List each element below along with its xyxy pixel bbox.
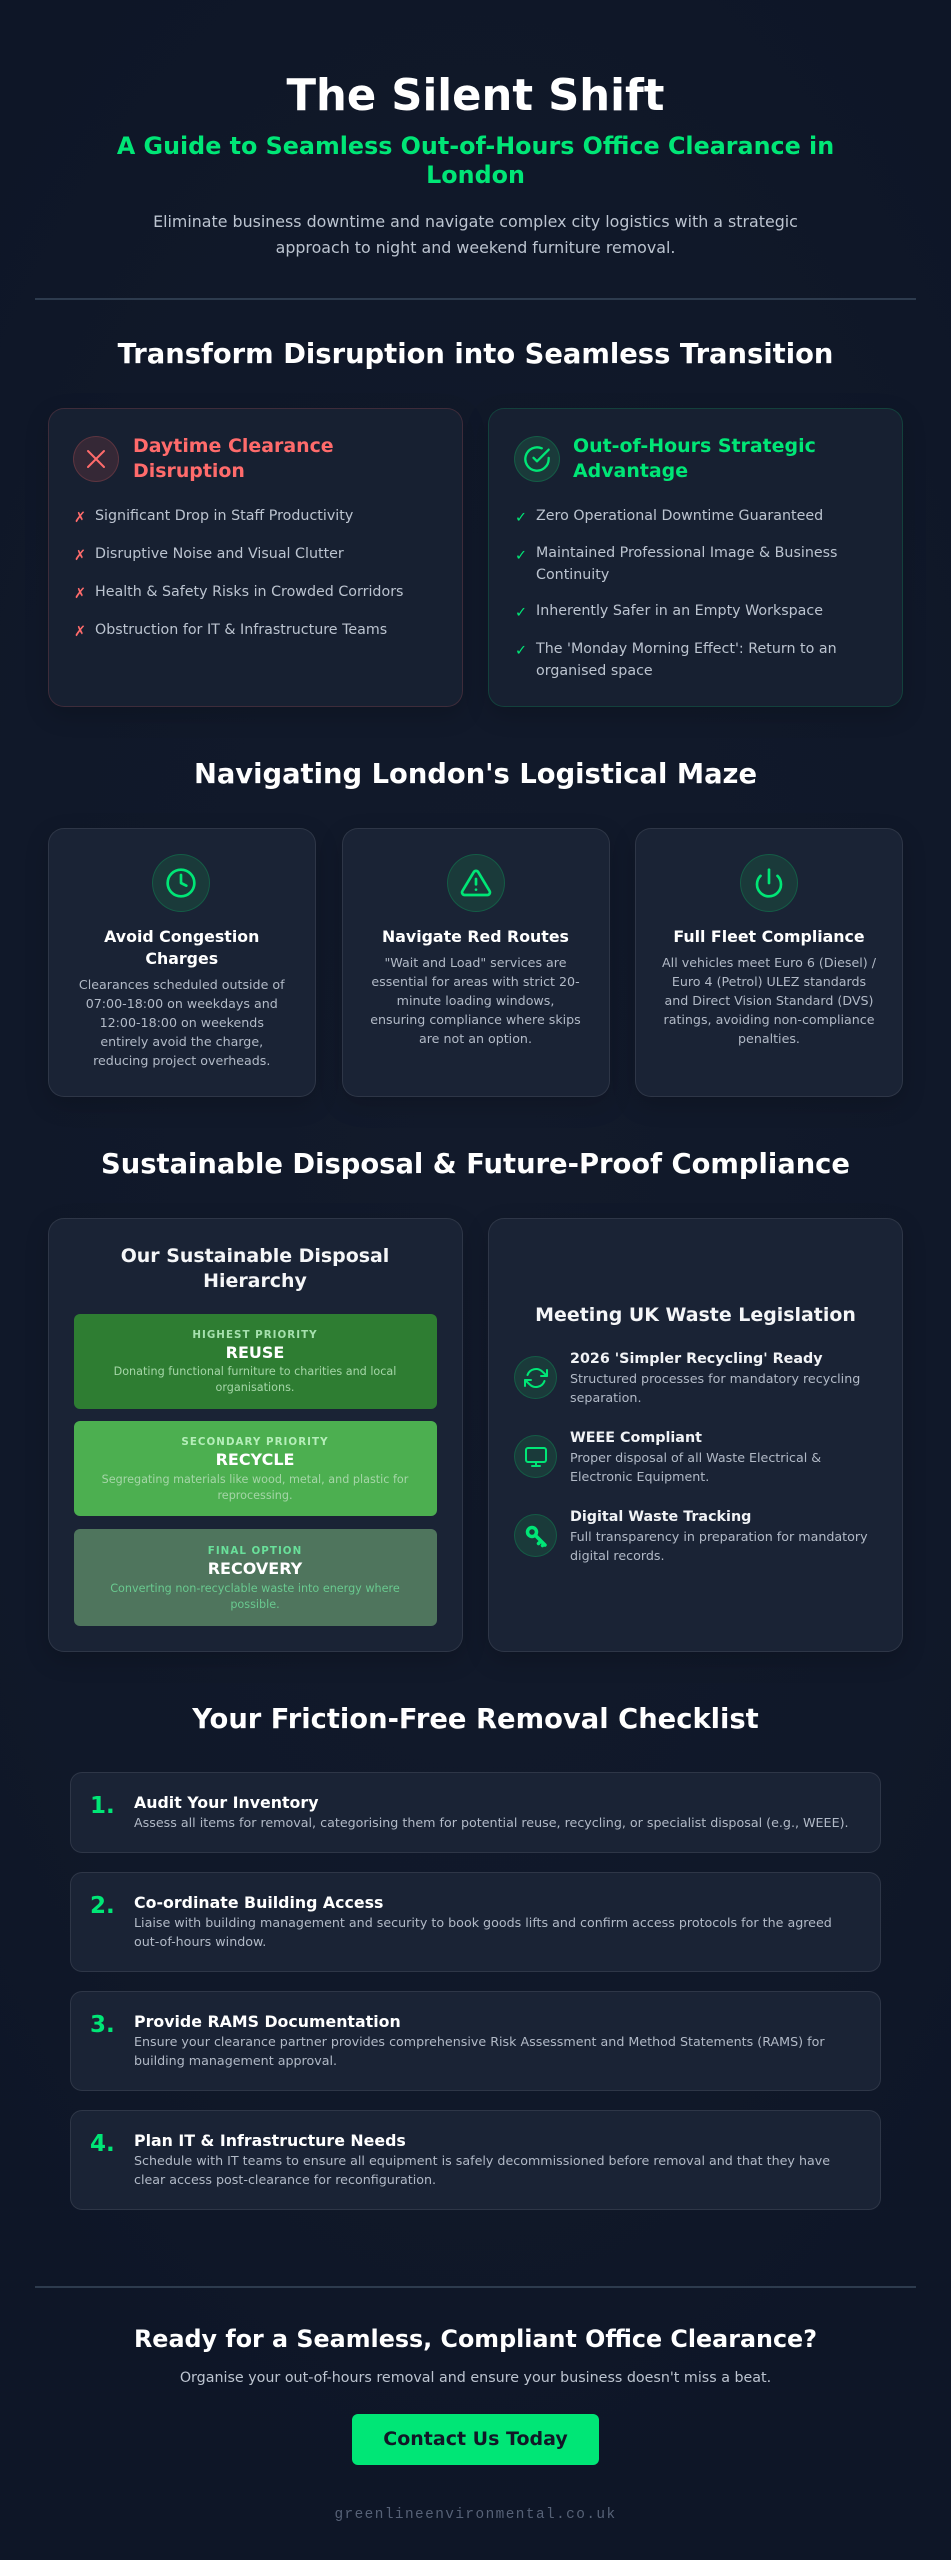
list: benefits: Maintained Professional Image & Business [536, 545, 837, 561]
subtitle [117, 132, 834, 189]
card text: ratings, avoiding non-compliance [664, 1012, 874, 1027]
list: benefits: Inherently Safer in an Empty Workspace [536, 603, 823, 619]
card text: 12:00-18:00 on weekends [100, 1015, 264, 1030]
item: simpler recycling: Structured processes for mandatory recycling [570, 1371, 860, 1386]
call to action heading: Ready for a Seamless, Compliant Office Clearance? [134, 2325, 817, 2353]
list: drawbacks: Obstruction for IT & Infrastructure Teams [95, 622, 387, 638]
icon: cross [73, 436, 119, 482]
card text: entirely avoid the charge, [100, 1034, 263, 1049]
step 2: Co-ordinate Building Access [134, 1893, 383, 1912]
panel: UK waste legislation [488, 1218, 903, 1652]
item: simpler recycling: 2026 'Simpler Recycling' Ready [570, 1351, 823, 1367]
button: contact: Contact Us Today [383, 2428, 568, 2450]
tier: reuse: HIGHEST PRIORITY [192, 1329, 318, 1341]
tier: recycle: SECONDARY PRIORITY [181, 1436, 329, 1448]
step 1 [70, 1772, 881, 1853]
list: benefits: Continuity [536, 567, 609, 583]
icon: monitor [514, 1435, 557, 1478]
panel: disposal hierarchy [48, 1218, 462, 1652]
list: drawbacks: Health & Safety Risks in Crowded Corridors [95, 584, 403, 600]
tier: recovery [74, 1529, 436, 1626]
list: benefits: ✓ [515, 510, 527, 526]
icon: key [514, 1514, 557, 1557]
list: drawbacks: Disruptive Noise and Visual Clutter [95, 546, 344, 562]
item: simpler recycling: separation. [570, 1390, 641, 1405]
panel heading: Our Sustainable Disposal [121, 1244, 389, 1266]
step 4: Plan IT & Infrastructure Needs [134, 2131, 406, 2150]
panel: red routes [342, 828, 610, 1097]
tier: recovery: FINAL OPTION [208, 1545, 302, 1557]
item: digital tracking: Digital Waste Tracking [570, 1509, 751, 1525]
tier: recycle [74, 1421, 436, 1516]
card text: and Direct Vision Standard (DVS) [664, 993, 873, 1008]
step 4: 4. [90, 2131, 115, 2157]
step 3: building management approval. [134, 2053, 337, 2068]
step 1: Assess all items for removal, categorising them for potential reuse, recycling, or specialist disposal (e.g., WEEE). [134, 1815, 849, 1830]
card text: ensuring compliance where skips [370, 1012, 581, 1027]
panel heading: Hierarchy [203, 1270, 307, 1292]
card heading: Charges [145, 949, 218, 968]
card heading [104, 927, 259, 968]
card text [662, 955, 876, 1046]
footer url: greenlineenvironmental.co.uk [334, 2507, 617, 2523]
list: benefits [515, 508, 837, 679]
list: benefits: ✓ [515, 548, 527, 564]
step 1: 1. [90, 1793, 115, 1819]
card heading: Full Fleet Compliance [673, 927, 865, 946]
heading: checklist: Your Friction-Free Removal Checklist [192, 1704, 759, 1734]
step 1: Audit Your Inventory [134, 1793, 318, 1812]
call to action text: Organise your out-of-hours removal and ensure your business doesn't miss a beat. [180, 2370, 771, 2386]
tier: recovery: RECOVERY [208, 1559, 302, 1578]
step 2: out-of-hours window. [134, 1934, 266, 1949]
panel heading: Out-of-Hours Strategic [573, 434, 816, 456]
subtitle: A Guide to Seamless Out-of-Hours Office Clearance in [117, 132, 834, 160]
panel heading: Advantage [573, 460, 688, 482]
panel heading: Meeting UK Waste Legislation [535, 1304, 856, 1326]
card text: Euro 4 (Petrol) ULEZ standards [672, 974, 866, 989]
card text: "Wait and Load" services are [384, 955, 567, 970]
card text: All vehicles meet Euro 6 (Diesel) / [662, 955, 876, 970]
card text: 07:00-18:00 on weekdays and [86, 996, 278, 1011]
icon: power [740, 854, 798, 912]
card heading: Avoid Congestion [104, 927, 259, 946]
item: WEEE: Proper disposal of all Waste Electrical & [570, 1450, 821, 1465]
step 3: Provide RAMS Documentation [134, 2012, 401, 2031]
tier: recovery: Converting non-recyclable waste into energy where [110, 1582, 400, 1594]
step 3: 3. [90, 2012, 115, 2038]
icon: clock [152, 854, 210, 912]
icon: warning triangle [446, 854, 504, 912]
step 4: clear access post-clearance for reconfiguration. [134, 2172, 436, 2187]
card heading: Navigate Red Routes [382, 927, 569, 946]
item: digital tracking: digital records. [570, 1548, 665, 1563]
card text: penalties. [738, 1031, 800, 1046]
step 3: Ensure your clearance partner provides comprehensive Risk Assessment and Method Statements (RAMS) for [134, 2034, 825, 2049]
card text: essential for areas with strict 20- [371, 974, 580, 989]
panel heading: Disruption [133, 460, 245, 482]
tier: reuse: REUSE [226, 1343, 284, 1362]
panel heading [573, 434, 816, 482]
step 2: Liaise with building management and security to book goods lifts and confirm access protocols for the agreed [134, 1915, 832, 1930]
heading: sustainable disposal: Sustainable Disposal & Future-Proof Compliance [101, 1148, 850, 1180]
card text [370, 955, 581, 1046]
heading: transform disruption: Transform Disruption into Seamless Transition [118, 339, 833, 370]
title: The Silent Shift [286, 70, 664, 120]
tier: recycle: Segregating materials like wood, metal, and plastic for [102, 1472, 408, 1486]
panel: congestion charges [48, 828, 316, 1097]
tier: recovery: possible. [230, 1598, 280, 1610]
intro text: approach to night and weekend furniture removal. [276, 238, 675, 257]
list: benefits: Zero Operational Downtime Guaranteed [536, 508, 823, 524]
tier: reuse [74, 1314, 436, 1409]
panel: fleet compliance [635, 828, 903, 1097]
item: digital tracking [514, 1509, 868, 1563]
list: benefits: ✓ [515, 643, 527, 659]
card text [79, 977, 285, 1068]
item: WEEE: Electronic Equipment. [570, 1469, 709, 1484]
list: drawbacks: ✗ [74, 586, 86, 602]
heading: logistics: Navigating London's Logistical Maze [194, 759, 757, 790]
list: benefits: The 'Monday Morning Effect': Return to an [536, 641, 837, 657]
tier: reuse: organisations. [216, 1381, 294, 1394]
tier: recycle: RECYCLE [216, 1450, 294, 1469]
step 4 [70, 2110, 881, 2210]
subtitle: London [426, 161, 525, 189]
icon: check circle [514, 436, 560, 482]
card text: Clearances scheduled outside of [79, 977, 285, 992]
panel heading: Daytime Clearance [133, 434, 334, 456]
panel: out-of-hours advantage [488, 408, 903, 707]
card text: minute loading windows, [397, 993, 554, 1008]
list: drawbacks: ✗ [74, 624, 86, 640]
panel heading [133, 434, 334, 482]
step 3 [70, 1991, 881, 2091]
list: benefits: organised space [536, 663, 653, 679]
item: WEEE: WEEE Compliant [570, 1430, 702, 1446]
step 2 [70, 1872, 881, 1972]
list: drawbacks: ✗ [74, 510, 86, 526]
item: simpler recycling [514, 1351, 860, 1405]
card text: reducing project overheads. [93, 1053, 270, 1068]
item: digital tracking: Full transparency in preparation for mandatory [570, 1529, 868, 1544]
tier: reuse: Donating functional furniture to charities and local [114, 1365, 396, 1378]
list: benefits: ✓ [515, 605, 527, 621]
intro text [153, 212, 798, 257]
item: WEEE [514, 1430, 821, 1484]
tier: recycle: reprocessing. [217, 1488, 293, 1502]
step 4: Schedule with IT teams to ensure all equipment is safely decommissioned before removal and that they have [134, 2153, 830, 2168]
icon: refresh [514, 1356, 557, 1399]
panel: daytime clearance disruption [48, 408, 463, 707]
list: drawbacks [74, 508, 403, 640]
button: contact [352, 2414, 599, 2465]
panel heading [121, 1244, 389, 1292]
list: drawbacks: ✗ [74, 548, 86, 564]
step 2: 2. [90, 1893, 115, 1919]
intro text: Eliminate business downtime and navigate complex city logistics with a strategic [153, 212, 798, 231]
list: drawbacks: Significant Drop in Staff Productivity [95, 508, 353, 524]
card text: are not an option. [419, 1031, 532, 1046]
